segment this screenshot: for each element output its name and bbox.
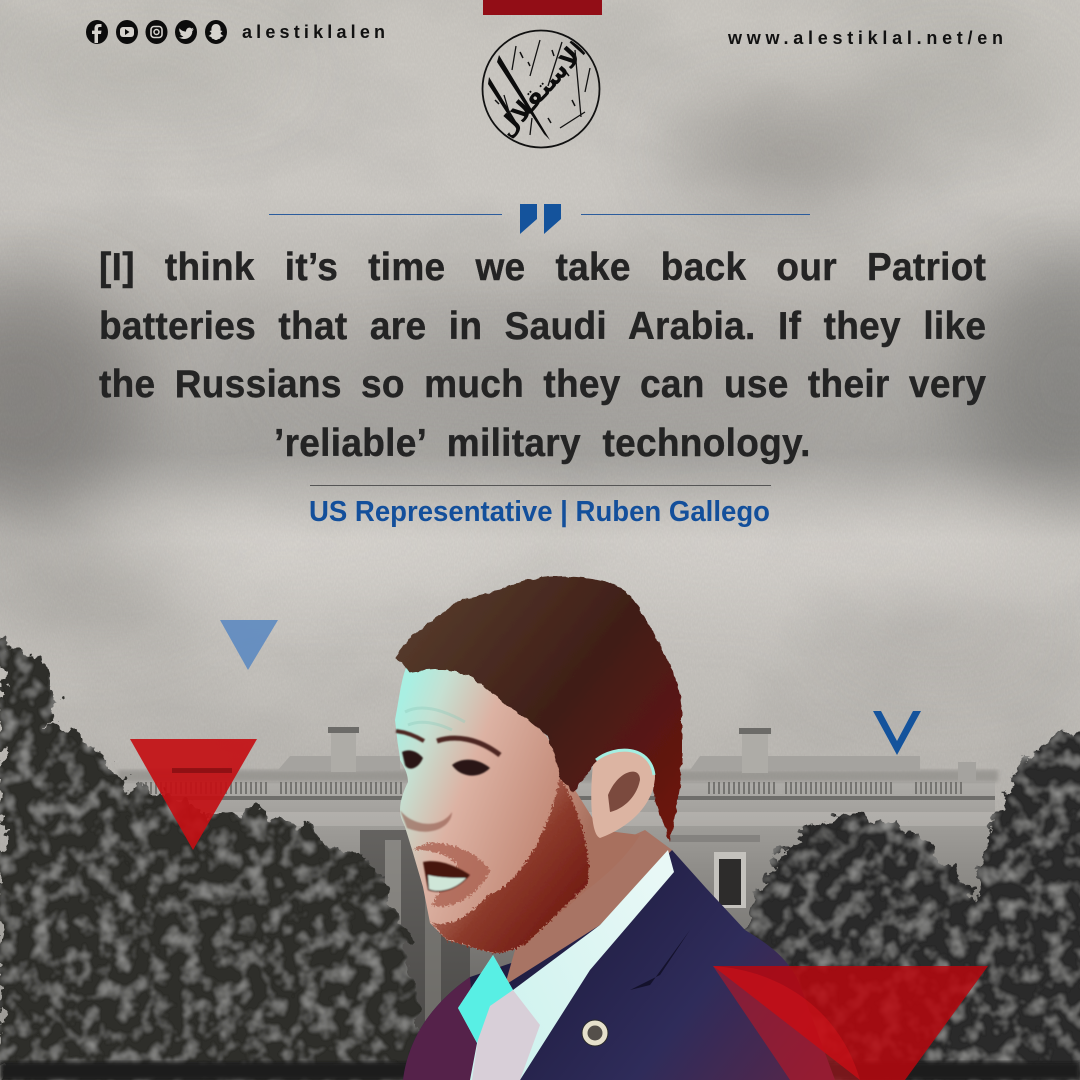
website: www.alestiklal.net/en: [727, 28, 1003, 48]
text: ’reliable’ military technology.: [274, 422, 811, 465]
top red tab: [483, 0, 602, 15]
attribution: US Representative | Ruben Gallego: [309, 496, 770, 528]
eyes: [452, 760, 490, 776]
face: [395, 660, 640, 953]
text: the Russians so much they can use their very: [99, 363, 986, 406]
quotation mark: [520, 204, 561, 234]
ear: [591, 749, 655, 838]
quote text: [99, 246, 986, 465]
divider left of quote mark: [269, 214, 502, 215]
portrait: [395, 577, 835, 1080]
building: White House: [118, 727, 998, 1072]
text: [I] think it’s time we take back our Patriot: [99, 246, 986, 289]
beard: [413, 777, 589, 953]
undershirt: [472, 990, 540, 1080]
jacket: [403, 850, 835, 1080]
divider under quote: [310, 485, 771, 486]
text: batteries that are in Saudi Arabia. If they like: [99, 305, 986, 348]
mouth: [396, 731, 500, 892]
lapel shadow: [630, 930, 690, 990]
ground strip: [0, 1062, 1080, 1080]
chevron: blue: [873, 711, 921, 755]
lapel pin: [582, 1020, 608, 1046]
divider right of quote mark: [581, 214, 810, 215]
forehead creases: [405, 708, 465, 730]
social icons: [86, 20, 227, 44]
ear rim highlight: [596, 750, 654, 775]
handle: alestiklalen: [242, 22, 385, 42]
hair: [395, 577, 682, 843]
logo: calligraphic roundel: الاستقلال: [490, 35, 593, 144]
nose shadow: [400, 810, 452, 832]
neck: [505, 830, 672, 985]
shirt collar: [458, 850, 674, 1080]
triangle: red: [130, 739, 257, 850]
inner ear: [608, 772, 640, 812]
trees: [0, 642, 1080, 1080]
triangle: light blue: [220, 620, 278, 670]
triangle: large red, bottom right: [713, 966, 988, 1080]
